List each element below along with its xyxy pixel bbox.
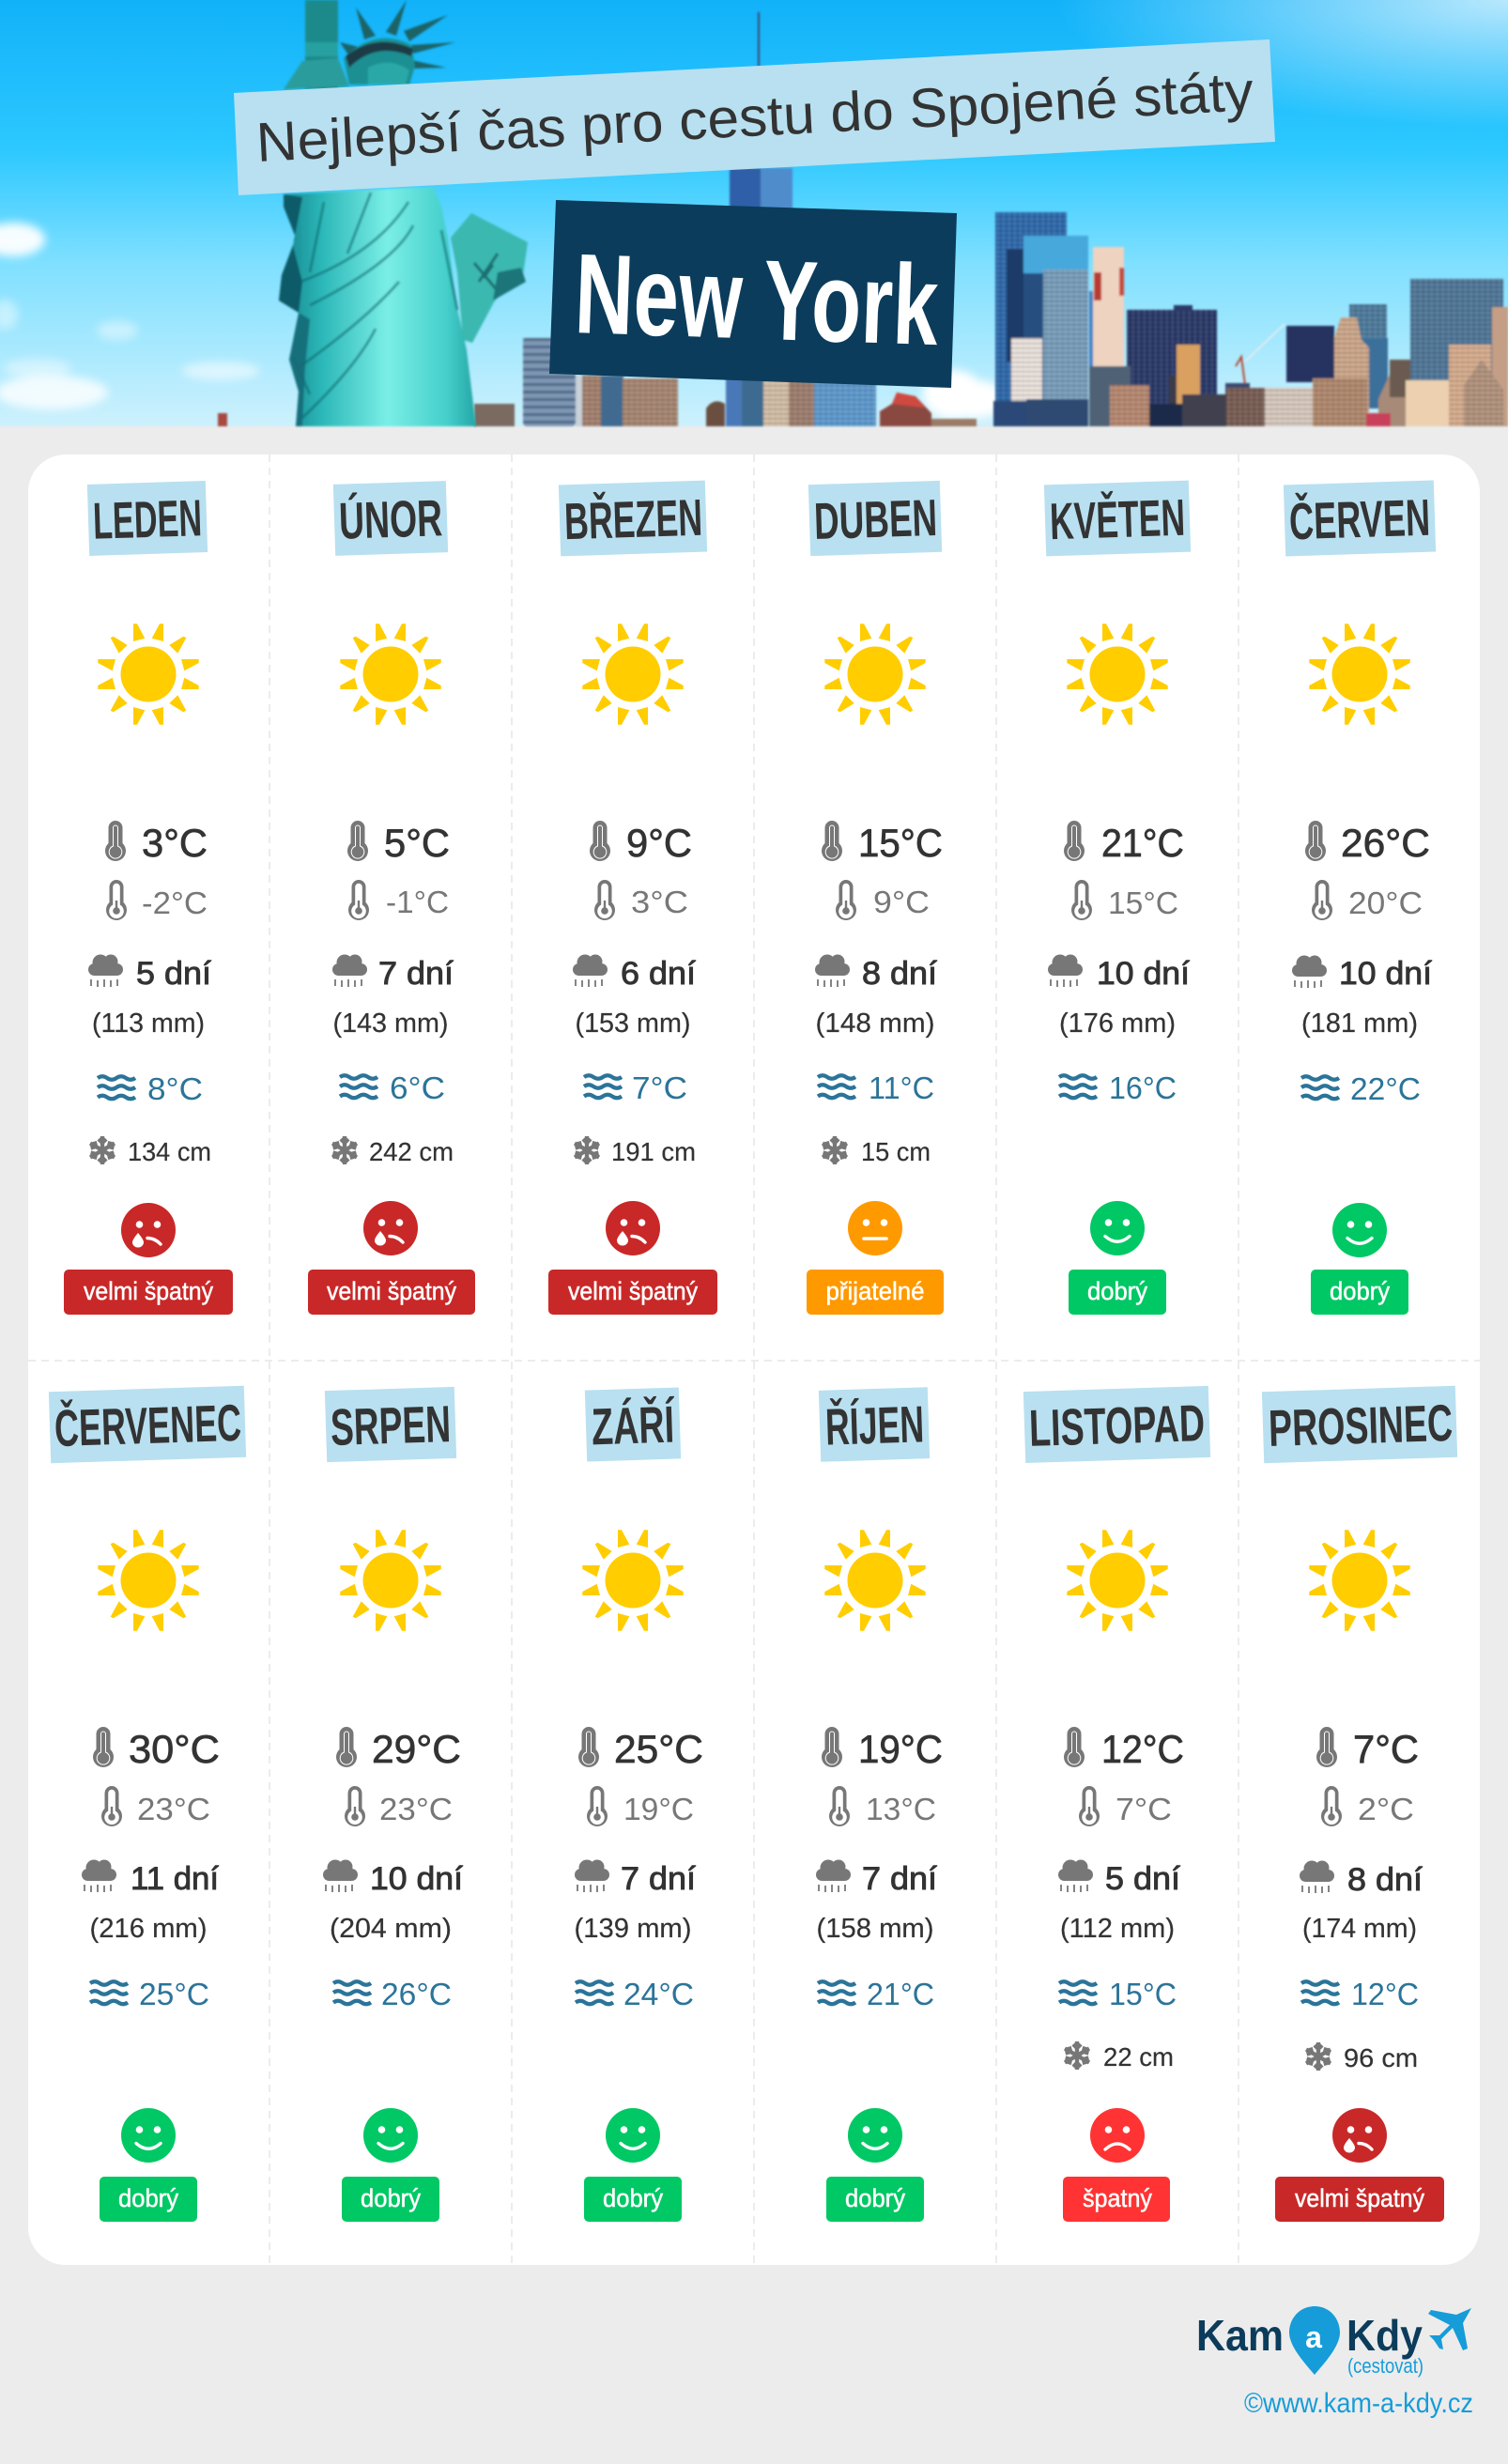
low temperature: 3°C [631,885,688,919]
column: SRPEN [323,1387,464,2222]
rainy days: 11 dní [131,1861,220,1897]
icon: thermometer low [594,880,615,920]
icon: sun [340,1530,441,1631]
icon: rain cloud [88,954,123,987]
month label: LEDEN [87,481,208,556]
icon: thermometer low [587,1786,608,1826]
rainy days: 7 dní [378,956,454,992]
rating badge: dobrý [118,2184,178,2212]
icon: rain cloud [332,954,367,987]
distant skyline [218,12,1508,426]
month label: DUBEN: DUBEN [813,488,938,550]
low temperature: 9°C [873,885,930,919]
icon: thermometer low [1321,1786,1342,1826]
column: ČERVENEC [49,1386,246,2222]
icon: water [340,1075,377,1098]
snow depth: 96 cm [1344,2043,1418,2072]
high temperature: 29°C [372,1727,461,1771]
icon: thermometer high [822,821,842,861]
icon: thermometer high [822,1727,842,1767]
icon: sun [1309,624,1410,725]
icon: smiling face [1090,1201,1145,1255]
rating badge: velmi špatný [1295,2184,1424,2212]
high temperature: 7°C [1353,1727,1419,1771]
water temperature: 7°C [632,1070,687,1105]
rainfall: (158 mm) [816,1914,934,1944]
low temperature: 2°C [1358,1792,1414,1826]
header banner photo: New York skyline with Statue of Liberty [0,0,1508,426]
water temperature: 25°C [139,1977,209,2011]
month label: KVĚTEN: KVĚTEN [1049,488,1186,550]
logo subtitle: (cestovat) [1347,2354,1423,2378]
rating badge [584,2177,682,2222]
column: LEDEN [64,481,233,1315]
month label: ČERVENEC: ČERVENEC [54,1394,242,1457]
month label: ZÁŘÍ [585,1387,681,1462]
icon: water [576,1981,613,2004]
rainfall: (153 mm) [575,1009,691,1039]
month label: LEDEN: LEDEN [92,488,203,550]
icon: sun [98,624,199,725]
rainfall: (216 mm) [89,1914,208,1944]
city title box: New York: New York [573,229,941,369]
city title box: New York [549,200,957,388]
rating badge: dobrý [1330,1277,1390,1305]
high temperature: 21°C [1101,821,1184,865]
month label: KVĚTEN [1044,481,1191,556]
high temperature: 30°C [129,1727,220,1771]
icon: water [818,1981,855,2004]
icon: sun [824,624,926,725]
icon: thermometer high [1064,821,1085,861]
icon: sun [582,624,684,725]
title band: Nejlepší čas pro cestu do Spojené státy [254,60,1255,174]
icon: thermometer high [105,821,126,861]
water temperature: 8°C [147,1071,203,1106]
rating badge: dobrý [603,2184,663,2212]
rating badge: velmi špatný [84,1277,213,1305]
icon: water [333,1981,371,2004]
high temperature: 5°C [384,821,450,865]
rating badge [1063,2177,1170,2222]
icon: sun [824,1530,926,1631]
month label: ŘÍJEN [819,1387,930,1462]
icon: water [584,1075,622,1098]
low temperature: 23°C [137,1792,210,1826]
icon: crying face [1332,2108,1387,2163]
column: ČERVEN [1284,481,1436,1315]
icon: rain cloud [82,1859,116,1892]
high temperature: 12°C [1101,1727,1184,1771]
icon: rain cloud [815,954,850,987]
high temperature: 25°C [614,1727,703,1771]
icon: neutral face [848,1201,902,1255]
icon: rain cloud [1058,1859,1093,1892]
month label: LISTOPAD: LISTOPAD [1028,1394,1206,1457]
snow depth: 191 cm [611,1137,696,1166]
high temperature: 19°C [858,1727,943,1771]
rating badge [1275,2177,1444,2222]
icon: sun [1067,624,1168,725]
rainy days: 10 dní [1339,956,1433,992]
icon: thermometer high [93,1727,114,1767]
icon: thermometer low [836,880,856,920]
month label: BŘEZEN: BŘEZEN [563,488,703,550]
low temperature: 7°C [1116,1792,1172,1826]
icon: thermometer low [1071,880,1092,920]
icon: rain cloud [816,1859,851,1892]
rating badge: velmi špatný [327,1277,456,1305]
rainfall: (143 mm) [332,1009,449,1039]
panel: monthly climate table [28,454,1480,2265]
icon: crying face [363,1201,418,1255]
website credit: ©www.kam-a-kdy.cz [1244,2388,1473,2419]
month label: ČERVEN [1284,481,1436,556]
water temperature: 22°C [1350,1071,1421,1106]
icon: smiling face [121,2108,176,2163]
column: ÚNOR [308,481,475,1315]
rainy days: 5 dní [136,956,212,992]
low temperature: -1°C [386,885,449,919]
icon: crying face [606,1201,660,1255]
icon: water [98,1076,135,1099]
rainfall: (139 mm) [574,1914,692,1944]
icon: smiling face [848,2108,902,2163]
icon: sun [340,624,441,725]
high temperature: 3°C [142,821,208,865]
logo word: Kam: Kam [1196,2311,1284,2360]
rainy days: 10 dní [370,1861,464,1897]
water temperature: 15°C [1109,1977,1177,2011]
month label: ZÁŘÍ: ZÁŘÍ [591,1395,676,1455]
rating badge: přijatelné [826,1277,924,1305]
rating badge [342,2177,439,2222]
month label: SRPEN: SRPEN [330,1394,452,1456]
icon: thermometer high [1305,821,1326,861]
icon: rain cloud [1292,956,1327,988]
icon: map pin with a: a [1305,2320,1322,2354]
icon: rain cloud [573,954,608,987]
icon: sun [1309,1530,1410,1631]
icon: airplane [1428,2308,1471,2350]
rating badge [548,1270,717,1315]
month label: LISTOPAD [1023,1386,1210,1463]
column: KVĚTEN [1044,481,1191,1315]
rating badge [64,1270,233,1315]
icon: crying face [121,1203,176,1257]
rainfall: (174 mm) [1302,1914,1417,1944]
rating badge [308,1270,475,1315]
month label: ŘÍJEN: ŘÍJEN [824,1394,925,1456]
month label: DUBEN [808,481,942,556]
low temperature: 19°C [623,1792,694,1826]
high temperature: 26°C [1341,821,1430,865]
logo: Kam a Kdy [1196,2306,1473,2419]
icon: sad face [1090,2108,1145,2163]
month label: BŘEZEN [559,481,707,556]
rating badge: špatný [1083,2184,1152,2212]
title band [234,39,1275,195]
icon: thermometer low [829,1786,850,1826]
icon: water [1059,1981,1097,2004]
low temperature: 23°C [379,1792,453,1826]
rating badge [1311,1270,1408,1315]
rating badge: velmi špatný [568,1277,698,1305]
icon: snowflake [1063,2041,1091,2070]
icon: snowflake [573,1136,601,1164]
water temperature: 26°C [381,1977,452,2011]
icon: thermometer high [1064,1727,1085,1767]
rainy days: 7 dní [862,1861,938,1897]
snow depth: 242 cm [369,1137,454,1166]
low temperature: 20°C [1348,886,1423,920]
icon: thermometer low [1312,880,1332,920]
icon: rain cloud [1300,1861,1334,1893]
rainy days: 10 dní [1097,956,1191,992]
water temperature: 12°C [1351,1977,1419,2011]
icon: thermometer low [348,880,369,920]
icon: smiling face [363,2108,418,2163]
column: PROSINEC [1262,1386,1457,2222]
rainy days: 6 dní [621,956,697,992]
rainfall: (176 mm) [1059,1009,1176,1039]
month label: ÚNOR [333,481,448,556]
rating badge [100,2177,197,2222]
column: LISTOPAD [1023,1386,1210,2222]
rating badge: dobrý [1087,1277,1147,1305]
icon: snowflake [331,1136,359,1164]
low temperature: 13°C [866,1792,936,1826]
column: ŘÍJEN [816,1387,943,2222]
icon: sun [582,1530,684,1631]
icon: smiling face [1332,1203,1387,1257]
snow depth: 15 cm [861,1137,931,1166]
icon: smiling face [606,2108,660,2163]
low temperature: 15°C [1108,886,1178,920]
rainfall: (148 mm) [815,1009,935,1039]
icon: sun [98,1530,199,1631]
high temperature: 9°C [626,821,692,865]
rainfall: (113 mm) [92,1009,205,1039]
water temperature: 16°C [1109,1070,1177,1105]
water temperature: 11°C [869,1070,934,1105]
rating badge: dobrý [845,2184,905,2212]
icon: rain cloud [1048,954,1083,987]
icon: thermometer high [347,821,368,861]
rainfall: (204 mm) [330,1914,452,1944]
column: BŘEZEN [548,481,717,1315]
icon: water [90,1981,128,2004]
water temperature: 24°C [623,1977,694,2011]
month label: ČERVEN: ČERVEN [1288,488,1431,550]
column: DUBEN [807,481,944,1315]
rainfall: (112 mm) [1060,1914,1175,1944]
rainfall: (181 mm) [1301,1009,1418,1039]
rainy days: 8 dní [1347,1862,1423,1898]
icon: sun [1067,1530,1168,1631]
water temperature: 21°C [867,1977,934,2011]
low temperature: -2°C [142,886,208,920]
icon: thermometer low [106,880,127,920]
rainy days: 8 dní [862,956,938,992]
icon: thermometer low [345,1786,365,1826]
rating badge [807,1270,944,1315]
icon: water [1301,1076,1339,1099]
high temperature: 15°C [858,821,943,865]
icon: water [818,1075,855,1098]
snow depth: 22 cm [1103,2042,1174,2071]
icon: rain cloud [575,1859,609,1892]
icon: snowflake [88,1136,116,1164]
rainy days: 5 dní [1105,1861,1181,1897]
icon: water [1059,1075,1097,1098]
right skyline [995,212,1067,426]
month label: ČERVENEC [49,1386,246,1463]
rainy days: 7 dní [621,1861,697,1897]
rating badge: dobrý [361,2184,421,2212]
month label: ÚNOR: ÚNOR [338,488,443,550]
snow depth: 134 cm [128,1137,211,1166]
month label: SRPEN [325,1387,456,1462]
icon: thermometer high [578,1727,599,1767]
icon: thermometer low [101,1786,122,1826]
icon: thermometer high [590,821,610,861]
icon: map pin with a [1289,2306,1340,2375]
icon: snowflake [821,1136,849,1164]
month label: PROSINEC [1262,1386,1457,1463]
water temperature: 6°C [390,1070,445,1105]
column: ZÁŘÍ [575,1387,703,2222]
icon: thermometer high [1316,1727,1337,1767]
rating badge [1069,1270,1166,1315]
icon: snowflake [1304,2042,1332,2071]
logo word: Kdy: Kdy [1346,2311,1423,2360]
icon: water [1301,1981,1339,2004]
Statue of Liberty [279,0,528,426]
icon: thermometer low [1079,1786,1100,1826]
icon: thermometer high [336,1727,357,1767]
rating badge [826,2177,924,2222]
icon: rain cloud [323,1859,358,1892]
